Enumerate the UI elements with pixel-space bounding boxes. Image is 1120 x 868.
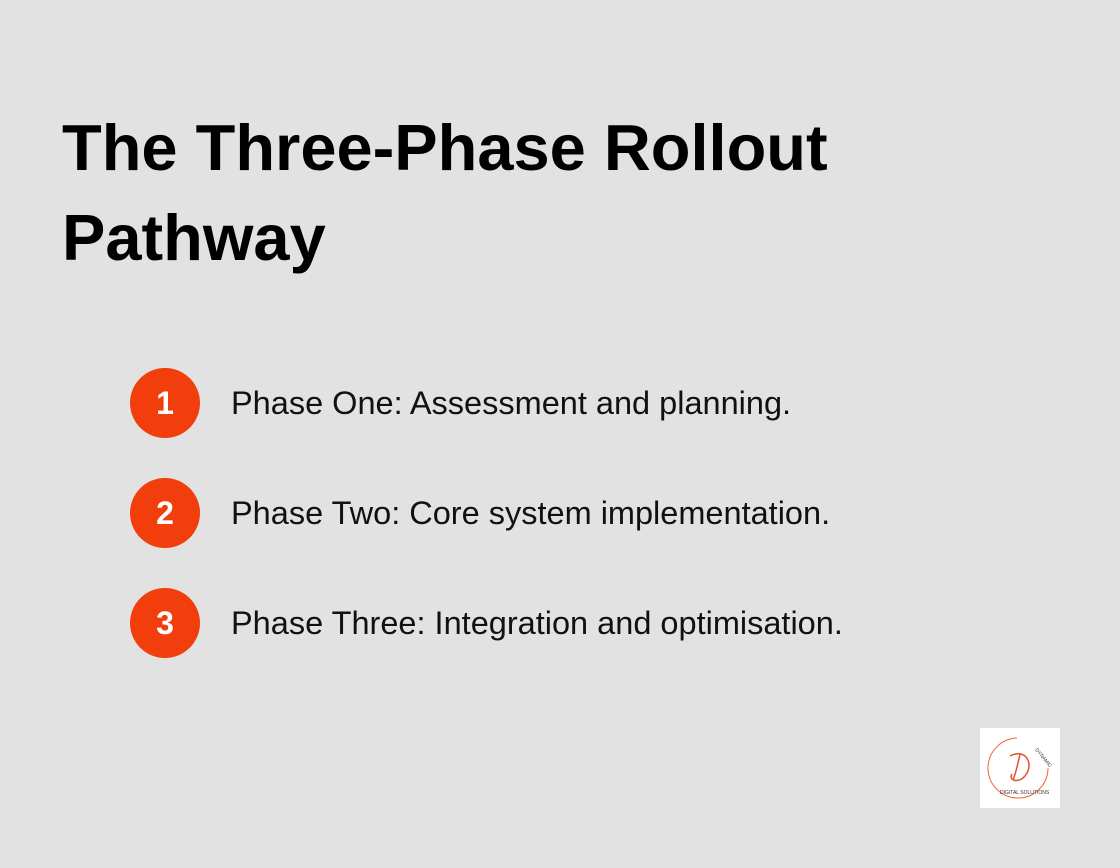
title: The Three-Phase Rollout [62, 111, 828, 184]
title [62, 111, 828, 274]
logo [980, 728, 1060, 808]
step 1 [130, 368, 791, 438]
step 3: Phase Three: Integration and optimisation. [231, 605, 843, 641]
step 2 [130, 478, 830, 548]
step 2: Phase Two: Core system implementation. [231, 495, 830, 531]
step 3: 3 [156, 605, 174, 641]
logo: DIGITAL SOLUTIONS [1000, 790, 1050, 796]
step 1: Phase One: Assessment and planning. [231, 385, 791, 421]
step 1: 1 [156, 385, 174, 421]
title: Pathway [62, 201, 326, 274]
logo: DYNAMIC [1033, 747, 1053, 769]
step 3 [130, 588, 843, 658]
step 2: 2 [156, 495, 174, 531]
